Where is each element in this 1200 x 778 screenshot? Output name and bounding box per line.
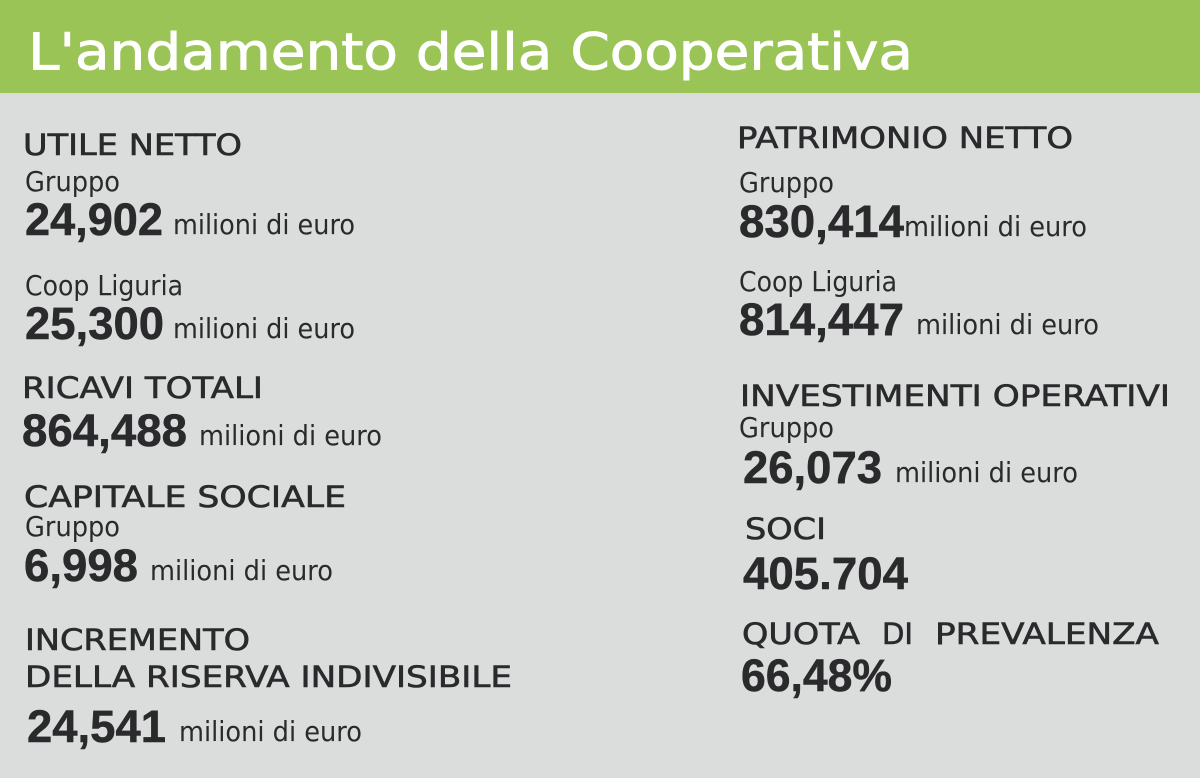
investimenti operativi: milioni di euro: [895, 456, 1078, 489]
patrimonio netto: [737, 121, 1099, 345]
patrimonio netto: 830,414: [739, 196, 904, 247]
soci: 405.704: [743, 548, 908, 599]
utile netto: Coop Liguria: [25, 269, 183, 302]
ricavi totali: 864,488: [22, 405, 187, 456]
soci: [743, 512, 908, 599]
quota di prevalenza: QUOTA: [742, 617, 860, 651]
quota di prevalenza: 66,48%: [741, 650, 892, 701]
patrimonio netto: milioni di euro: [916, 308, 1099, 341]
investimenti operativi: Gruppo: [739, 411, 834, 444]
patrimonio netto: PATRIMONIO NETTO: [737, 121, 1073, 155]
quota di prevalenza: DI: [882, 617, 913, 651]
quota di prevalenza: PREVALENZA: [935, 617, 1159, 651]
investimenti operativi: [739, 379, 1170, 493]
utile netto: milioni di euro: [173, 208, 355, 241]
title banner: [0, 0, 1200, 93]
utile netto: 25,300: [25, 298, 164, 349]
incremento della riserva indivisibile: DELLA RISERVA INDIVISIBILE: [25, 660, 512, 694]
capitale sociale: CAPITALE SOCIALE: [24, 480, 346, 514]
incremento della riserva indivisibile: INCREMENTO: [25, 623, 250, 657]
quota di prevalenza: [741, 617, 1159, 701]
capitale sociale: milioni di euro: [150, 554, 333, 587]
utile netto: UTILE NETTO: [23, 128, 242, 162]
investimenti operativi: INVESTIMENTI OPERATIVI: [740, 379, 1170, 413]
ricavi totali: RICAVI TOTALI: [22, 371, 263, 405]
patrimonio netto: Coop Liguria: [739, 265, 897, 298]
utile netto: 24,902: [25, 194, 163, 245]
capitale sociale: Gruppo: [25, 510, 120, 543]
capitale sociale: [24, 480, 346, 591]
patrimonio netto: 814,447: [739, 294, 904, 345]
patrimonio netto: Gruppo: [739, 166, 834, 199]
incremento della riserva indivisibile: [25, 623, 512, 752]
utile netto: Gruppo: [25, 165, 120, 198]
utile netto: milioni di euro: [173, 312, 355, 345]
investimenti operativi: 26,073: [743, 442, 882, 493]
incremento della riserva indivisibile: milioni di euro: [179, 715, 362, 748]
patrimonio netto: milioni di euro: [904, 210, 1087, 243]
title banner: L'andamento della Cooperativa: [28, 24, 913, 82]
ricavi totali: milioni di euro: [199, 419, 382, 452]
ricavi totali: [22, 371, 382, 456]
capitale sociale: 6,998: [24, 540, 138, 591]
incremento della riserva indivisibile: 24,541: [27, 701, 166, 752]
soci: SOCI: [745, 512, 826, 546]
utile netto: [23, 128, 355, 349]
